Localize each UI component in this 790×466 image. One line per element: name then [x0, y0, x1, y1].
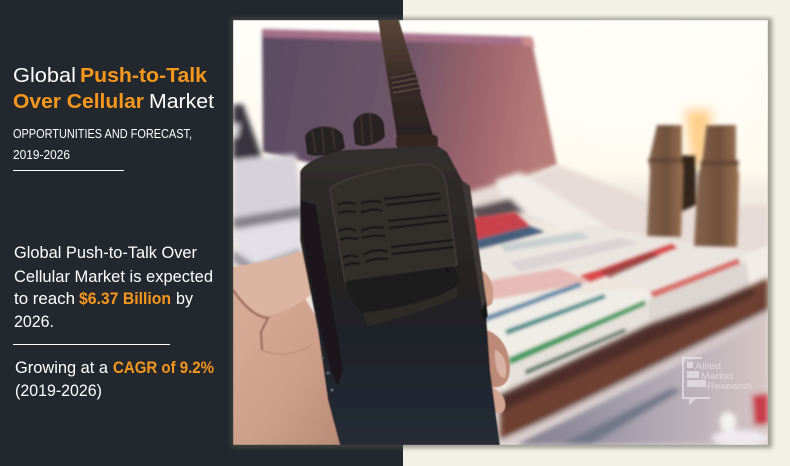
CAGR statement [15, 359, 214, 400]
hand: palm [233, 285, 340, 445]
background: binoculars [647, 110, 739, 247]
market size statement: Global Push-to-Talk Over [14, 244, 197, 262]
title: Over Cellular [13, 91, 144, 113]
watermark: Allied Market Research logo: Market [701, 371, 733, 382]
photo: hand holding a walkie-talkie on a desk [233, 20, 770, 446]
radio: speaker panel with grille [330, 164, 457, 282]
divider between statements [13, 344, 170, 345]
hand: thumb [233, 252, 313, 354]
background: monitor [262, 29, 557, 200]
page background: light right half [403, 0, 790, 466]
CAGR statement: CAGR of 9.2% [113, 359, 214, 377]
title: Market [149, 91, 214, 113]
divider under subtitle [13, 170, 124, 171]
CAGR statement: (2019-2026) [15, 382, 102, 400]
market size statement: to reach [14, 290, 75, 308]
subtitle: opportunities and forecast [13, 127, 192, 162]
title [13, 65, 214, 113]
radio: side grip and edge highlights [300, 180, 488, 391]
walkie-talkie body [300, 146, 500, 445]
market size statement: 2026. [14, 313, 54, 331]
radio: dark display button [346, 266, 458, 326]
background: telephone and pale desk items [460, 165, 768, 255]
watermark: Allied Market Research logo: Allied [695, 361, 721, 372]
CAGR statement: Growing at a [15, 359, 109, 377]
hand: fingers behind the radio [480, 270, 510, 414]
background: window glow [768, 67, 769, 114]
title: Global [13, 65, 76, 87]
market size statement: $6.37 Billion [79, 290, 171, 308]
market size statement: Cellular Market is expected [14, 268, 213, 286]
background: wooden desk edge [500, 278, 768, 446]
walkie-talkie knobs [305, 113, 385, 156]
logo icon: speech bubble report [682, 357, 710, 405]
watermark: Allied Market Research logo [682, 357, 752, 405]
panel: dark left background [0, 0, 403, 466]
background: dark object and papers on the left [233, 104, 303, 272]
walkie-talkie antenna [378, 20, 438, 148]
background: stacked folders with coloured tabs [470, 212, 768, 395]
market size statement [14, 244, 213, 331]
title: Push-to-Talk [80, 65, 208, 87]
photo shadow [231, 18, 772, 448]
market size statement: by [176, 290, 194, 308]
watermark: Allied Market Research logo: Research [707, 381, 752, 392]
subtitle: opportunities and forecast: OPPORTUNITIES AND FORECAST, [13, 127, 192, 141]
subtitle: opportunities and forecast: 2019-2026 [13, 148, 70, 162]
